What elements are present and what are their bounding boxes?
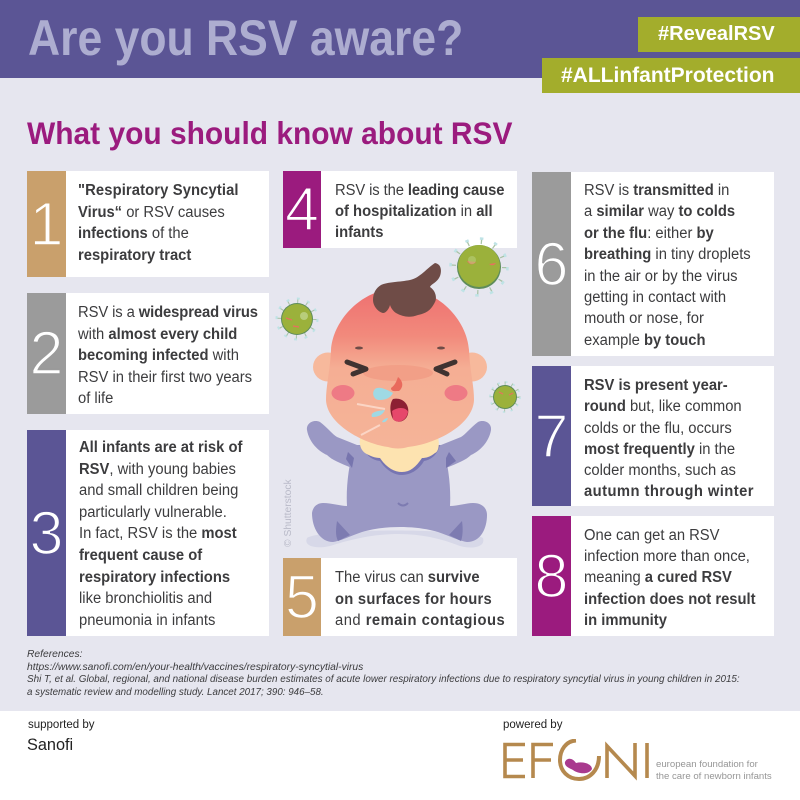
text 2 — [78, 304, 258, 407]
number 2: 2 — [30, 319, 63, 387]
image credit: © Shutterstock — [283, 479, 294, 547]
logo tagline: european foundation for — [656, 759, 758, 770]
references: Shi T, et al. Global, regional, and national disease burden estimates of acute lower respiratory infections due to respiratory syncytial virus in young children in 2015: — [27, 674, 740, 685]
hashtag: RevealRSV — [638, 17, 800, 52]
snot — [373, 388, 393, 400]
brows — [355, 346, 363, 350]
supported by: supported by — [28, 719, 94, 731]
references — [27, 649, 740, 698]
logo: EFCNI — [503, 739, 772, 782]
number 8: 8 — [535, 542, 568, 610]
text 3: pneumonia in infants — [79, 612, 215, 629]
belly button — [398, 503, 408, 506]
virus right — [490, 382, 520, 412]
number 2 — [27, 293, 66, 414]
text 5 — [335, 569, 505, 629]
floor shadow — [306, 530, 483, 547]
number 1 — [27, 171, 66, 277]
text 7: autumn through winter — [584, 483, 754, 500]
text 5: The virus can survive — [335, 569, 480, 586]
text 1: respiratory tract — [78, 246, 191, 264]
text 4: RSV is the leading cause — [335, 182, 504, 199]
eyes — [347, 362, 366, 374]
panel: card 3 — [27, 430, 269, 636]
text 2: with almost every child — [78, 326, 237, 342]
nose — [391, 377, 402, 391]
number 7: 7 — [535, 402, 568, 470]
logo tagline — [656, 759, 772, 782]
panel: card 7 — [532, 366, 774, 506]
logo baby — [565, 759, 592, 773]
head — [326, 288, 474, 448]
illustration: sick baby with viruses — [276, 237, 521, 548]
text 6: RSV is transmitted in — [584, 182, 729, 199]
logo tagline: the care of newborn infants — [656, 771, 772, 782]
text 3: like bronchiolitis and — [79, 590, 212, 607]
title: Are you RSV aware? — [28, 10, 463, 66]
logo letters — [503, 739, 649, 781]
number 3 — [27, 430, 66, 636]
panel: card 5 — [283, 558, 517, 636]
virus large — [450, 238, 508, 296]
text 2: RSV in their first two years — [78, 368, 252, 386]
references: a systematic review and modelling study. Lancet 2017; 390: 946–58. — [27, 687, 324, 698]
text 3: RSV, with young babies — [79, 461, 236, 478]
text 3: and small children being — [79, 482, 238, 499]
text 1: infections of the — [78, 225, 189, 242]
number 4: 4 — [285, 175, 319, 243]
text 1 — [78, 182, 239, 264]
hashtag: ALLinfantProtection — [542, 58, 800, 93]
ears — [313, 352, 343, 382]
powered by: powered by — [503, 719, 562, 731]
text 8: in immunity — [584, 612, 667, 629]
references: https://www.sanofi.com/en/your-health/vaccines/respiratory-syncytial-virus — [27, 662, 363, 673]
right arm — [436, 421, 491, 468]
number 6 — [532, 172, 571, 356]
text 5: on surfaces for hours — [335, 590, 492, 608]
text 7: most frequently in the — [584, 441, 735, 458]
text 7: colder months, such as — [584, 462, 736, 479]
number 5: 5 — [285, 562, 319, 630]
text 6: breathing in tiny droplets — [584, 246, 751, 263]
text 8: One can get an RSV — [584, 527, 720, 544]
text 3: All infants are at risk of — [79, 439, 242, 456]
virus left — [276, 298, 318, 340]
limb shadows — [336, 521, 350, 541]
text 1: "Respiratory Syncytial — [78, 182, 239, 199]
panel: card 4 — [283, 171, 517, 248]
text 6: a similar way to colds — [584, 203, 735, 220]
text 3: frequent cause of — [79, 547, 202, 564]
panel: card 8 — [532, 516, 774, 636]
text 7: round but, like common — [584, 398, 742, 415]
number 6: 6 — [535, 230, 568, 298]
text 3: respiratory infections — [79, 569, 230, 586]
text 8: meaning a cured RSV — [584, 569, 732, 586]
text 4: of hospitalization in all — [335, 203, 493, 220]
text 3: In fact, RSV is the most — [79, 525, 237, 542]
text 6: or the flu: either by — [584, 225, 714, 242]
text 4: infants — [335, 224, 383, 241]
mouth — [390, 399, 408, 422]
number 1: 1 — [30, 190, 63, 258]
text 6: mouth or nose, for — [584, 310, 704, 327]
text 2: becoming infected with — [78, 347, 239, 364]
hashtag: ALLinfantProtection: #ALLinfantProtection — [561, 64, 774, 87]
panel: card 2 — [27, 293, 269, 414]
text 8 — [584, 527, 756, 629]
footer — [0, 711, 800, 800]
body and legs — [312, 445, 487, 542]
number 7 — [532, 366, 571, 506]
references: References: — [27, 649, 83, 660]
sneeze lines — [357, 404, 385, 435]
text 3: particularly vulnerable. — [79, 504, 227, 521]
text 2: of life — [78, 390, 113, 407]
nose flush — [363, 365, 433, 381]
number 3: 3 — [30, 498, 63, 566]
cheeks — [332, 385, 354, 401]
text 4 — [335, 182, 504, 241]
panel: card 6 — [532, 172, 774, 356]
number 8 — [532, 516, 571, 636]
text 3 — [79, 439, 242, 629]
panel: card 1 — [27, 171, 269, 277]
text 8: infection more than once, — [584, 548, 750, 565]
text 6: in the air or by the virus — [584, 268, 738, 285]
text 6: example by touch — [584, 332, 706, 349]
heading: What you should know about RSV — [27, 115, 512, 151]
hair — [373, 263, 441, 317]
text 1: Virus“ or RSV causes — [78, 204, 225, 220]
hashtag: RevealRSV: #RevealRSV — [658, 23, 775, 45]
text 7 — [584, 377, 754, 500]
text 7: RSV is present year- — [584, 377, 728, 394]
text 5: and remain contagious — [335, 612, 505, 629]
header band — [0, 0, 800, 78]
text 6: getting in contact with — [584, 289, 726, 306]
text 7: colds or the flu, occurs — [584, 420, 732, 437]
left arm — [307, 421, 362, 468]
text 2: RSV is a widespread virus — [78, 304, 258, 321]
text 6 — [584, 182, 751, 349]
collar — [362, 445, 440, 475]
sponsor: Sanofi: Sanofi — [27, 736, 73, 754]
text 8: infection does not result — [584, 591, 756, 608]
